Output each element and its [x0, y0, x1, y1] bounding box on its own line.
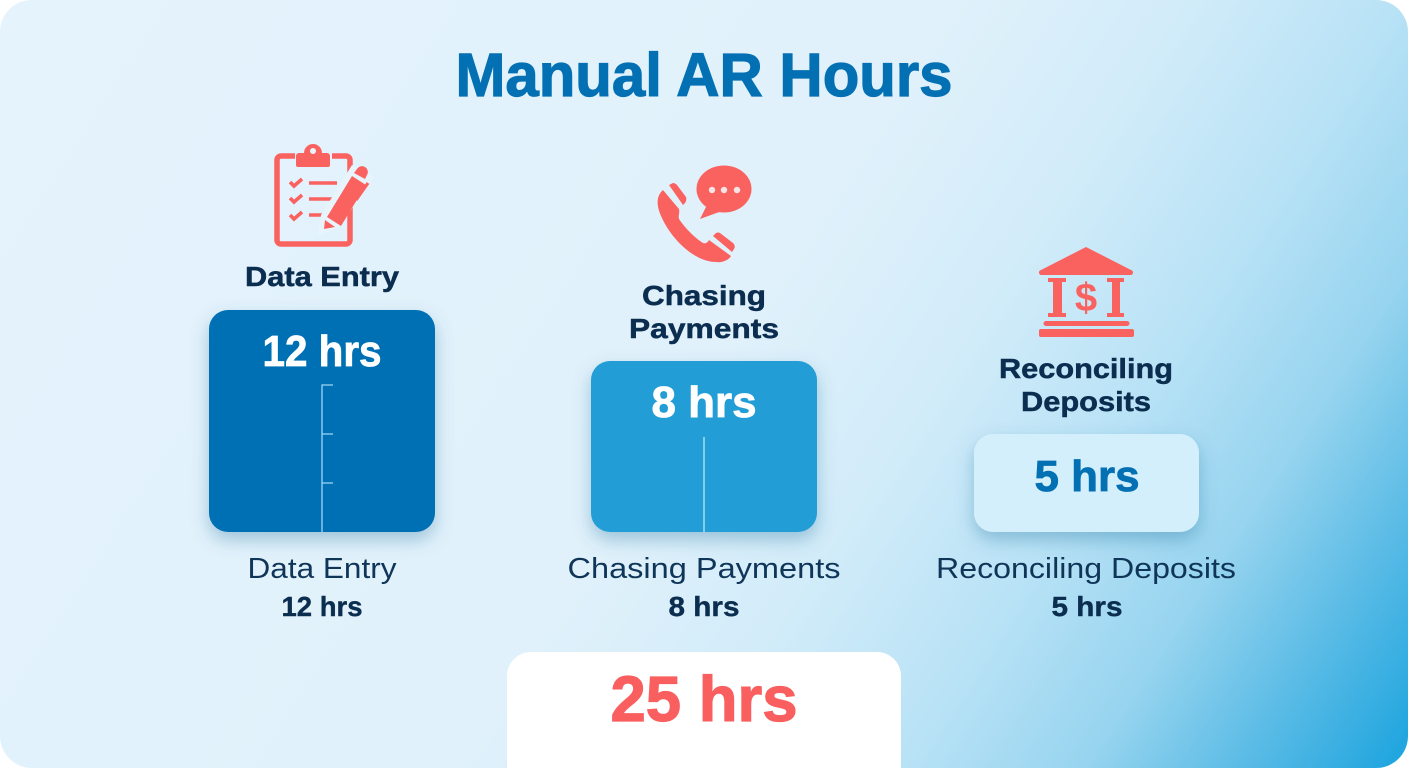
bar: 8 hrs [591, 361, 817, 532]
icon: bank: $ [1075, 276, 1097, 320]
label: chasing payments: Chasing Payments [568, 553, 840, 585]
value: 5 hrs: 5 hrs [1052, 591, 1122, 622]
icon: clipboard and pen [277, 144, 374, 244]
bar: 5 hrs [974, 434, 1199, 532]
column: reconciling deposits: Deposits [1021, 386, 1151, 417]
label: reconciling deposits: Reconciling Deposits [936, 553, 1236, 585]
column: reconciling deposits [936, 247, 1236, 622]
value: 12 hrs: 12 hrs [282, 591, 362, 622]
column: chasing payments [568, 166, 840, 622]
icon: bank [1039, 247, 1134, 337]
total value: 25 hrs [610, 663, 798, 735]
bar: 8 hrs: 8 hrs [652, 378, 756, 427]
heading: data entry: Data Entry [245, 261, 399, 292]
label: data entry: Data Entry [248, 553, 397, 585]
heading: reconciling deposits: Reconciling [999, 353, 1173, 384]
heading: chasing payments: Chasing [642, 280, 766, 311]
column: chasing payments: Payments [629, 313, 779, 344]
bar: 12 hrs [209, 310, 435, 532]
column: data entry [209, 144, 435, 622]
icon: phone and speech bubble [658, 166, 752, 262]
total card [507, 652, 901, 768]
bar: 5 hrs: 5 hrs [1034, 452, 1140, 501]
bar: 12 hrs: 12 hrs [262, 327, 382, 376]
value: 8 hrs: 8 hrs [668, 591, 740, 622]
title: Manual AR Hours [456, 41, 952, 109]
